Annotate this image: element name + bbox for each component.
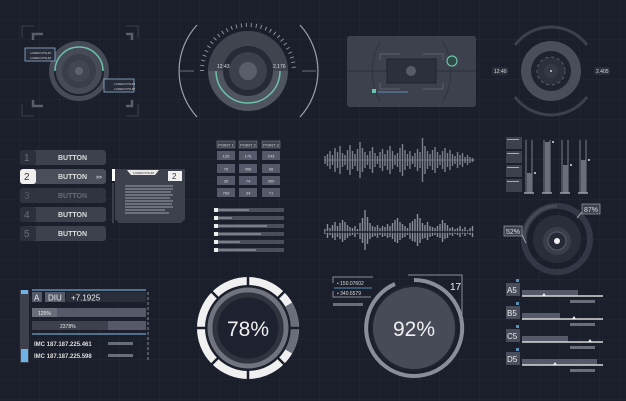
readouts: 2.176 (273, 64, 286, 70)
label boxes: LOREM IPSUM (30, 51, 52, 55)
data table: 176 (245, 154, 252, 158)
horizontal sliders A5-D5: A5 (507, 286, 517, 295)
data table: 74 (246, 178, 251, 184)
data panel bottom-left: IMC 187.187.225.461 (34, 342, 92, 348)
data panel bottom-left: 2378% (60, 324, 76, 330)
ring gauge 78%: 78% (227, 318, 269, 341)
data table (217, 141, 280, 197)
readouts: 2.405 (596, 69, 609, 75)
button list: BUTTON (58, 174, 87, 181)
coordinates box (333, 277, 373, 306)
label boxes (25, 48, 136, 92)
button list: 4 (24, 210, 30, 221)
button list: >> (96, 175, 102, 181)
data table: POINT 1 (218, 142, 235, 148)
data table: 34 (246, 190, 251, 196)
button list: 1 (24, 153, 30, 164)
data table: 76 (224, 166, 229, 172)
button list: 3 (24, 191, 30, 202)
reticle gauge top-left (22, 26, 138, 116)
sliders (214, 208, 284, 252)
data panel bottom-left: 125% (38, 311, 51, 317)
radial gauge with percentages (504, 204, 600, 272)
ring gauge 92%: 92% (393, 318, 435, 341)
lorem text panel: LOREM IPSUM (133, 171, 155, 175)
readouts (217, 64, 286, 70)
waveform 1 (325, 138, 475, 182)
horizontal sliders A5-D5: C5 (507, 332, 518, 341)
button list: 5 (24, 229, 30, 240)
readouts: 12:43 (217, 64, 230, 70)
button list: BUTTON (58, 231, 87, 238)
percent labels: 87% (584, 207, 598, 214)
ring gauge 92%: 17 (450, 282, 462, 293)
horizontal sliders A5-D5 (506, 279, 603, 372)
button list: BUTTON (58, 193, 87, 200)
horizontal sliders A5-D5: D5 (507, 355, 518, 364)
data table: 456 (245, 166, 252, 172)
dial gauge top-center (179, 25, 318, 117)
lorem text panel: 2 (172, 172, 177, 181)
gauge top-right (492, 27, 610, 115)
data table: POINT 2 (240, 142, 257, 148)
vertical bar chart (506, 137, 590, 193)
button list (20, 150, 106, 241)
coordinates box: • 340.6579 (337, 291, 361, 297)
coordinates box: • 150.07602 (337, 281, 364, 287)
ring gauge 92% (333, 275, 462, 376)
percent labels (504, 204, 600, 243)
label boxes: LOREM IPSUM (30, 56, 52, 60)
data table: 126 (223, 154, 230, 158)
readouts: 12:40 (494, 69, 507, 75)
waveform 2 (325, 210, 475, 250)
button list: BUTTON (58, 212, 87, 219)
button list: BUTTON (58, 155, 87, 162)
button list: 2 (24, 172, 30, 183)
horizontal sliders A5-D5: B5 (507, 309, 517, 318)
data panel bottom-left: DIU (48, 294, 62, 302)
data table: POINT 3 (263, 142, 280, 148)
percent labels: 52% (506, 229, 520, 236)
label boxes: LOREM IPSUM (114, 82, 136, 86)
data panel bottom-left: +7.1925 (71, 294, 101, 302)
data panel bottom-left: IMC 187.187.225.598 (34, 354, 92, 360)
data panel bottom-left (20, 290, 148, 363)
ring gauge 78% (196, 276, 300, 380)
lorem text panel (112, 169, 185, 223)
data table: 243 (268, 154, 275, 158)
label boxes: LOREM IPSUM (114, 87, 136, 91)
camera panel top-center-right (347, 36, 476, 107)
data panel bottom-left: A (34, 294, 40, 302)
data table: 68 (269, 166, 274, 172)
data table: 350 (268, 178, 275, 184)
icon: target (447, 56, 457, 66)
data table: 71 (269, 190, 274, 196)
data table: 35 (224, 178, 229, 184)
data table: 760 (223, 190, 230, 196)
readouts (492, 67, 610, 75)
